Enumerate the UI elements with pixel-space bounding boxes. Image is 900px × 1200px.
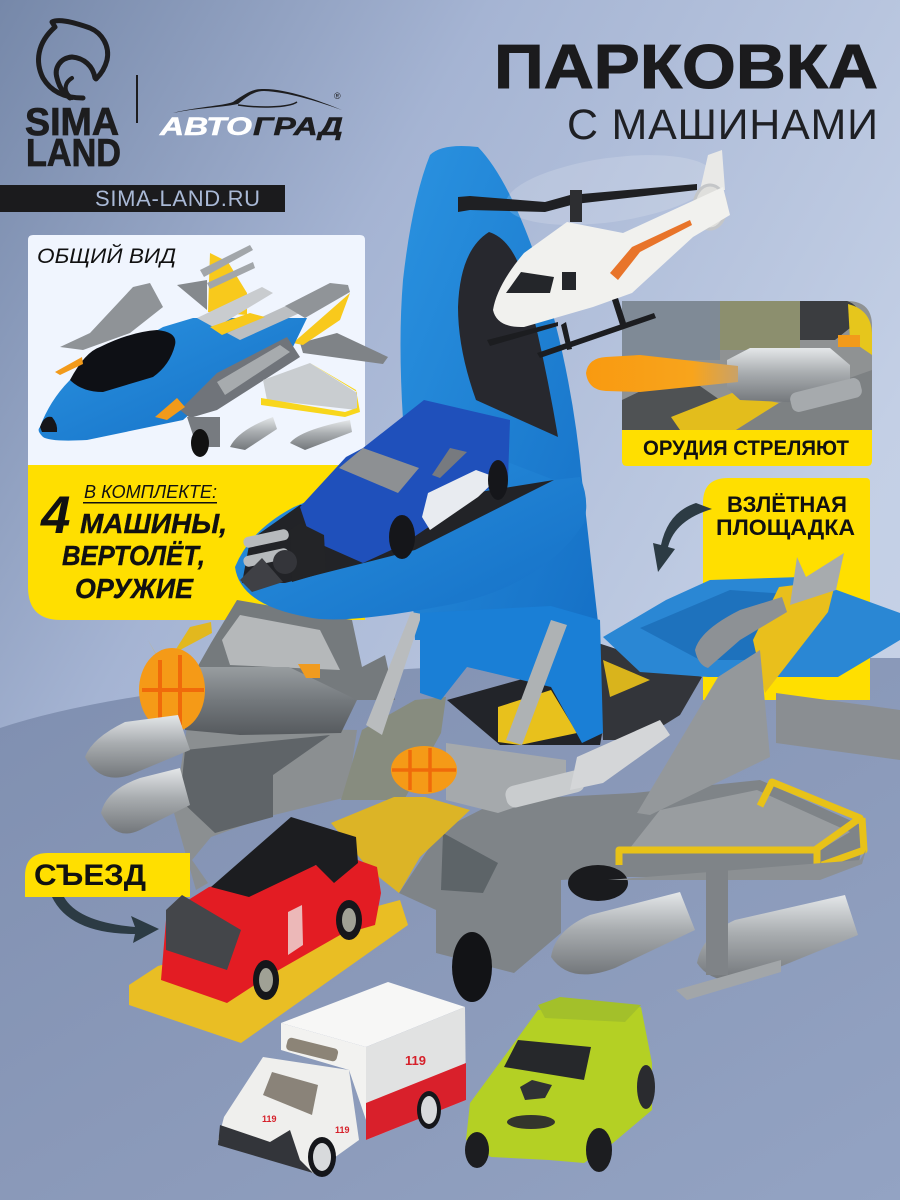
logo divider — [136, 75, 138, 123]
website bar — [0, 185, 285, 212]
exit label: СЪЕЗД — [34, 859, 146, 892]
text: ВЗЛЁТНАЯ — [727, 492, 847, 517]
panel: overall view — [28, 235, 388, 465]
white ambulance — [218, 982, 466, 1177]
heading: overall view: ОБЩИЙ ВИД — [37, 245, 176, 268]
panel: guns shoot — [586, 301, 872, 466]
text: machines list: ВЕРТОЛЁТ, — [62, 540, 205, 571]
logo: Sima Land — [25, 21, 121, 175]
arrow to ramp — [52, 897, 159, 943]
police car — [300, 400, 510, 563]
toy: right wing, tail and engine — [391, 650, 866, 1002]
logo: Avtograd: ГРАД — [253, 113, 343, 141]
title: С МАШИНАМИ — [567, 101, 878, 149]
panel: takeoff area: ПЛОЩАДКА — [716, 515, 855, 540]
text: machines list — [62, 508, 227, 604]
green pickup — [465, 997, 655, 1172]
logo: Sima Land: LAND — [26, 132, 121, 175]
icon: dolphin — [39, 21, 108, 98]
wordmark: SIMA — [25, 101, 119, 144]
white ambulance: 119 — [262, 1114, 277, 1124]
toy: left engine and guns — [85, 600, 446, 890]
panel: guns shoot: ОРУДИЯ СТРЕЛЯЮТ — [643, 437, 849, 460]
logo: Avtograd: АВТО — [159, 113, 253, 141]
arrow to takeoff area — [653, 503, 712, 572]
text: in the set: В КОМПЛЕКТЕ: — [84, 482, 217, 502]
white ambulance: 119 — [335, 1125, 350, 1135]
plane illustration — [39, 245, 388, 457]
white ambulance: 119 — [405, 1053, 426, 1068]
yellow rail — [619, 782, 864, 868]
text: machines list: ОРУЖИЕ — [75, 573, 194, 604]
red fire truck — [161, 817, 381, 1003]
title — [494, 33, 878, 149]
website bar: SIMA-LAND.RU — [95, 186, 260, 211]
logo: Avtograd — [159, 89, 343, 141]
toy: takeoff deck — [603, 553, 900, 760]
toy: yellow ramp — [129, 797, 470, 1043]
label — [622, 430, 872, 466]
panel: kit contents — [28, 465, 365, 620]
toy: boat hull with police car — [235, 400, 586, 619]
toy: tall blue hull — [400, 146, 600, 640]
panel: takeoff area — [703, 478, 870, 700]
helicopter — [458, 144, 730, 358]
logo: Avtograd: ® — [334, 91, 341, 101]
title: ПАРКОВКА — [494, 33, 878, 102]
gun muzzle flash — [586, 335, 863, 413]
exit label — [25, 853, 190, 897]
text: machines list: МАШИНЫ, — [80, 508, 227, 539]
text: big 4: 4 — [40, 486, 70, 545]
toy: center cargo and blue strut — [420, 606, 702, 745]
